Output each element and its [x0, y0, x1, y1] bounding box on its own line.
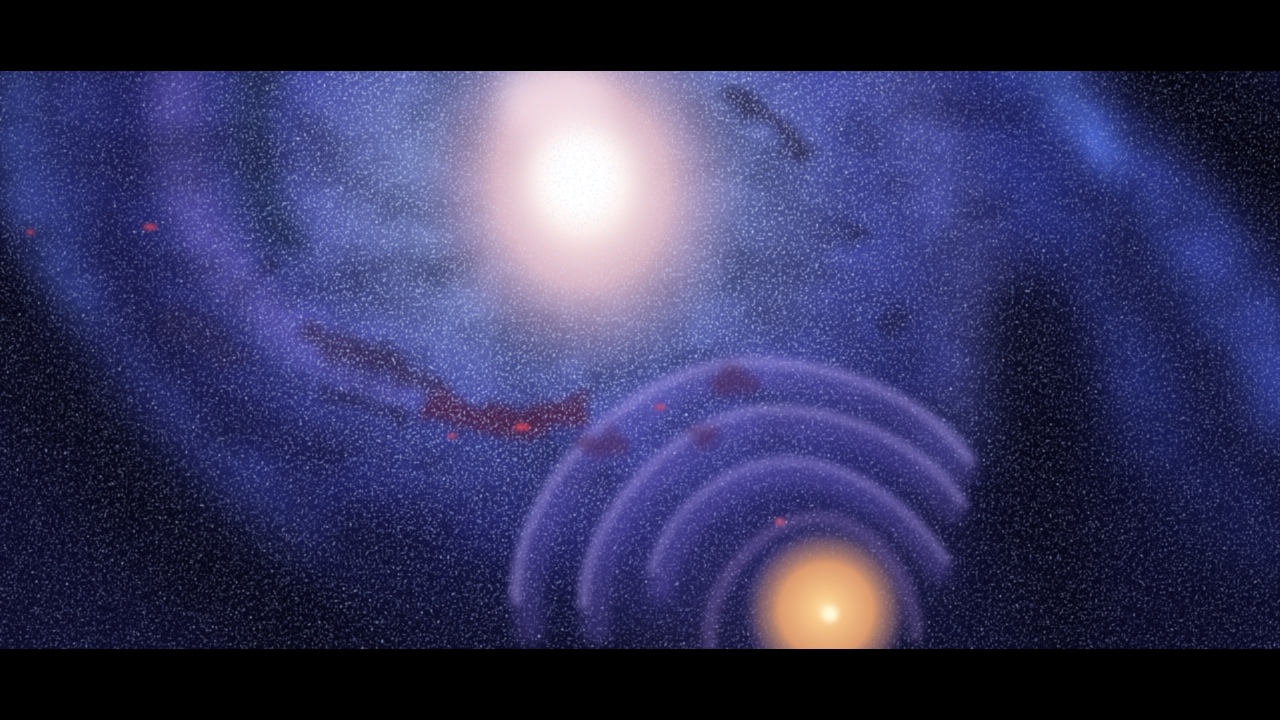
radiating wave rings — [516, 362, 970, 665]
cloud mottling — [0, 71, 1280, 559]
dust lanes — [160, 90, 905, 423]
red nebula spots — [26, 224, 785, 526]
dust over rings — [575, 370, 766, 460]
glowing sun — [744, 529, 907, 649]
wave ring 1 — [516, 362, 970, 630]
galactic core — [384, 0, 780, 407]
ring-region star overlay — [500, 350, 980, 649]
wave ring 2 — [584, 409, 962, 630]
ring glow — [570, 424, 962, 649]
spiral arms — [13, 50, 1280, 560]
wave ring 3 — [652, 461, 946, 590]
wave ring 4 — [709, 518, 916, 645]
dim region right of the core — [725, 190, 825, 350]
